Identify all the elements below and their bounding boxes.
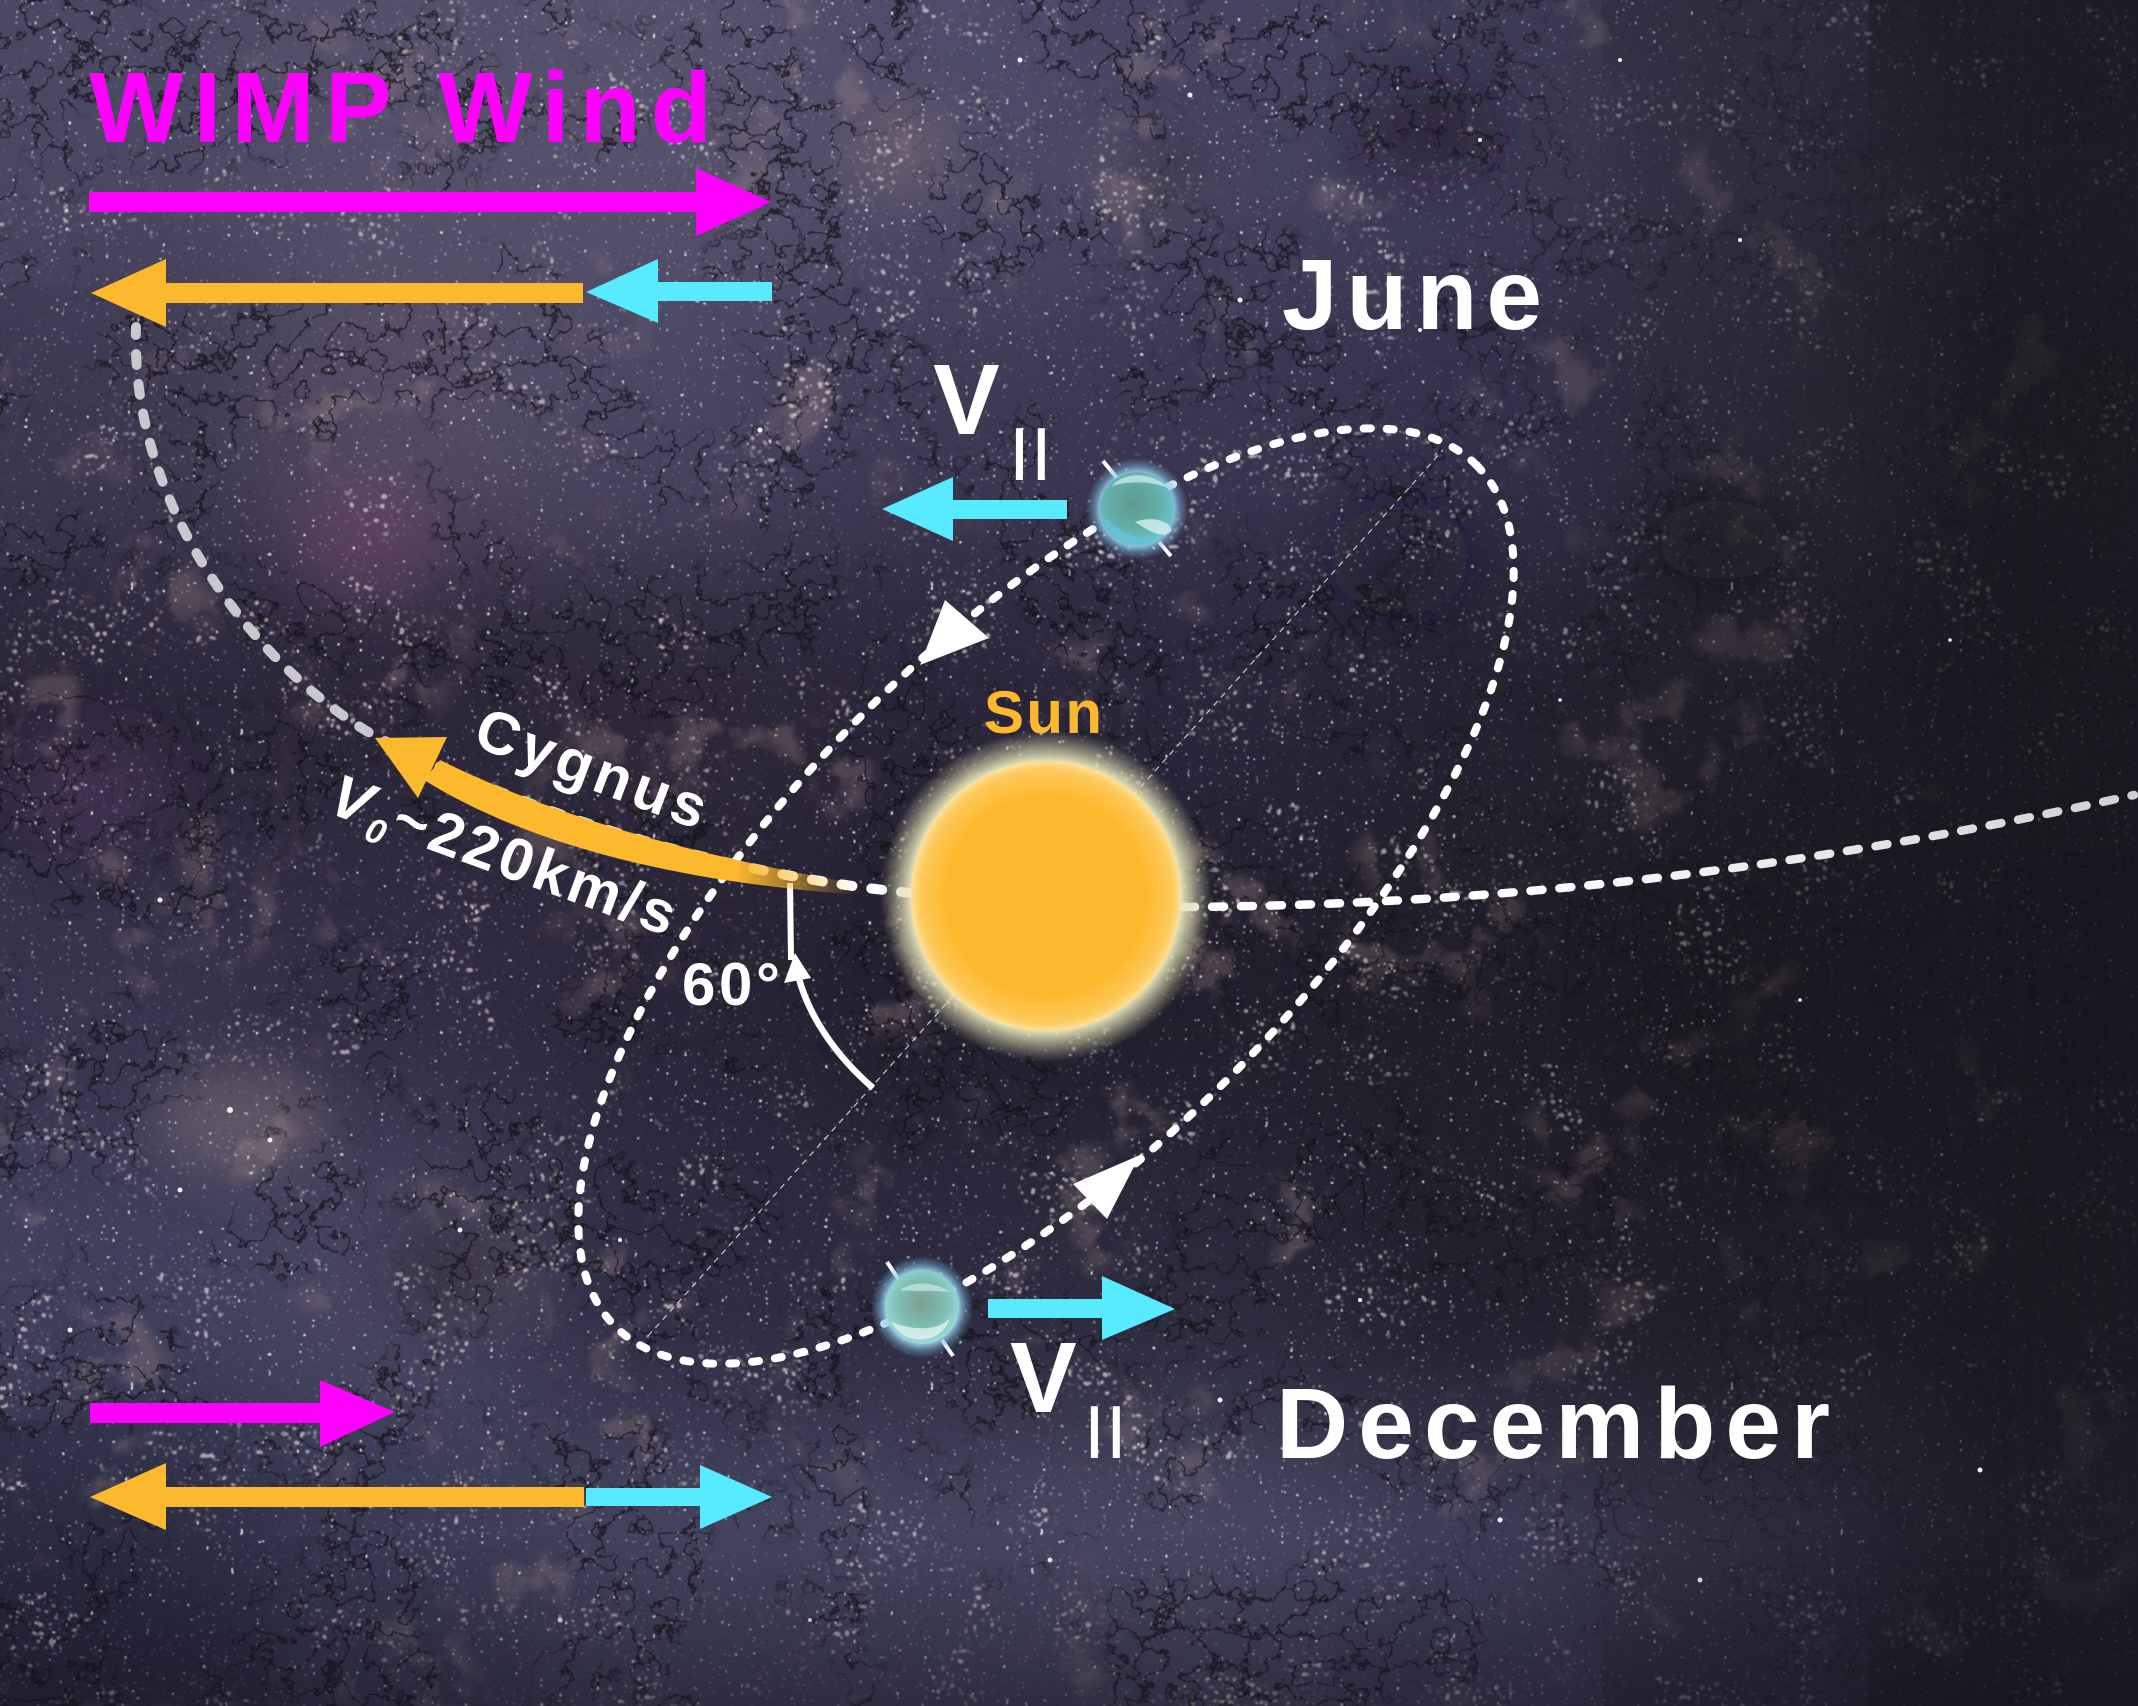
arrow: cyan Earth velocity June — [882, 477, 1067, 541]
arrow: cyan June — [586, 259, 772, 323]
earth: December — [871, 1256, 973, 1358]
heading: WIMP Wind: WIMP Wind — [89, 52, 712, 164]
label: December: December — [1276, 1368, 1830, 1480]
arrow: orange June — [91, 259, 583, 327]
label: V parallel June: V — [933, 344, 1000, 456]
earth orbit: dashed ellipse — [433, 283, 1659, 1509]
arrow: orange December — [90, 1463, 584, 1530]
galactic path: left dashed line — [136, 327, 912, 893]
galactic path: right dashed line — [1183, 795, 2134, 907]
earth: June — [1086, 458, 1188, 560]
arrow: WIMP wind June — [89, 168, 771, 236]
label: V0 speed: 0 — [360, 810, 395, 854]
label: Sun: Sun — [984, 679, 1102, 746]
label: Cygnus: Cygnus — [466, 694, 717, 842]
label: 60 degrees: 60° — [682, 951, 780, 1018]
arrow: cyan Earth velocity December — [988, 1276, 1175, 1340]
arrow: cyan December — [586, 1465, 772, 1529]
label: V parallel December: II — [1084, 1390, 1128, 1474]
arrow: WIMP wind December — [90, 1380, 395, 1447]
label: V parallel December — [1010, 1322, 1128, 1474]
orbit direction arrow: upper — [920, 600, 989, 665]
sun — [880, 730, 1212, 1062]
orbit direction arrow: lower — [1073, 1155, 1140, 1219]
Cygnus arrow — [375, 737, 862, 895]
orbit axis: thin dashed line — [648, 450, 1443, 1336]
label: V parallel June: II — [1009, 412, 1053, 496]
label: V parallel June — [933, 344, 1053, 496]
label: V parallel December: V — [1010, 1322, 1077, 1434]
60 degree angle arrow — [784, 883, 873, 1088]
label: V0 speed: V — [322, 761, 387, 840]
label: June: June — [1282, 239, 1542, 351]
label: V0 speed: ~220km/s — [384, 784, 689, 950]
